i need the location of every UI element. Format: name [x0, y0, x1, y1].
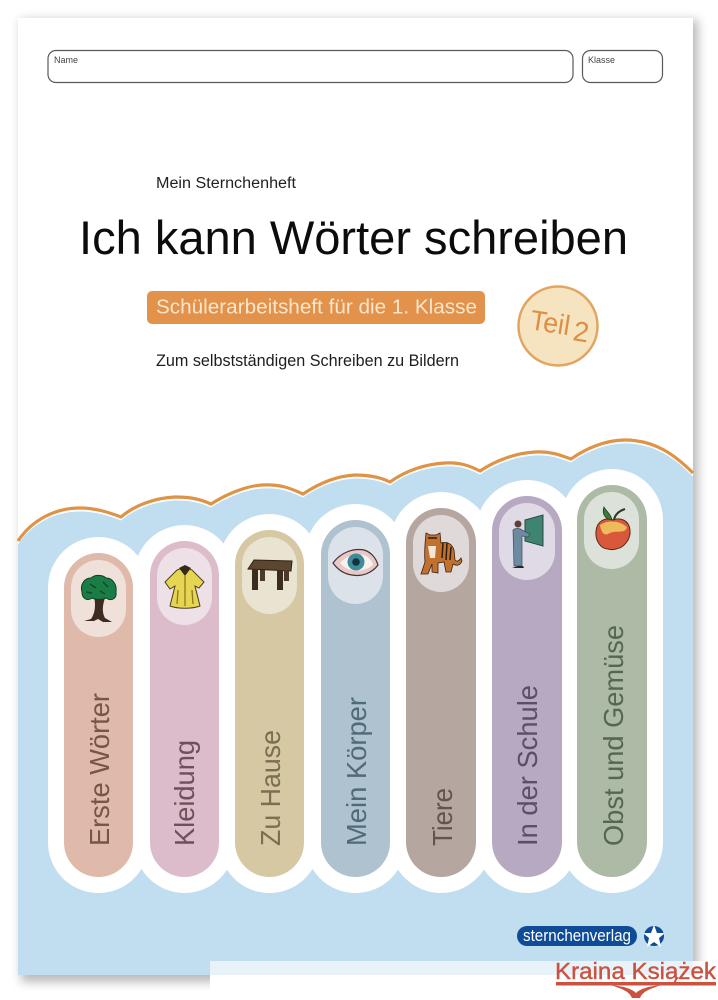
category: In der Schule	[492, 496, 562, 877]
icon: apple	[596, 507, 630, 550]
icon: table	[248, 560, 292, 590]
label: Tiere: Tiere	[427, 788, 458, 846]
label: Erste Wörter: Erste Wörter	[84, 693, 115, 846]
part two stamp: Teil	[528, 304, 572, 341]
white pill halos	[48, 469, 663, 893]
class field	[582, 50, 662, 82]
category: Mein Körper	[321, 520, 390, 877]
category: Kleidung	[150, 541, 219, 877]
label: Zu Hause: Zu Hause	[255, 730, 286, 846]
label: In der Schule: In der Schule	[512, 685, 543, 846]
publisher logo: sternchenverlag	[523, 926, 631, 945]
category: Zu Hause	[235, 530, 304, 877]
name field	[48, 50, 573, 82]
label: Mein Körper: Mein Körper	[341, 697, 372, 846]
name field: Name	[54, 55, 78, 65]
icon: tree	[81, 575, 116, 622]
category: Erste Wörter	[64, 553, 133, 877]
icon: tiger	[421, 533, 462, 574]
series label: Mein Sternchenheft	[156, 175, 297, 192]
watermark logo: Kraina Książek: Kraina Książek	[555, 958, 717, 984]
category: Obst und Gemüse	[577, 485, 647, 877]
title: Ich kann Wörter schreiben	[79, 211, 628, 264]
label: Obst und Gemüse: Obst und Gemüse	[598, 625, 629, 846]
orange subtitle badge	[147, 291, 485, 324]
icon: eye	[333, 550, 378, 576]
watermark logo: Kraina Książek	[555, 958, 717, 998]
icon: blouse	[165, 565, 204, 608]
part two stamp	[518, 286, 598, 366]
part two stamp: 2	[571, 315, 591, 348]
bottom white overlay band	[210, 961, 718, 1000]
orange subtitle badge: Schülerarbeitsheft für die 1. Klasse	[156, 296, 477, 318]
description: Zum selbstständigen Schreiben zu Bildern	[156, 352, 459, 370]
blue wave background	[18, 444, 693, 975]
orange wave line	[18, 440, 693, 541]
class field: Klasse	[588, 55, 615, 65]
icon: teacher at blackboard	[512, 515, 543, 568]
category: Tiere	[406, 508, 476, 877]
label: Kleidung: Kleidung	[169, 740, 200, 846]
